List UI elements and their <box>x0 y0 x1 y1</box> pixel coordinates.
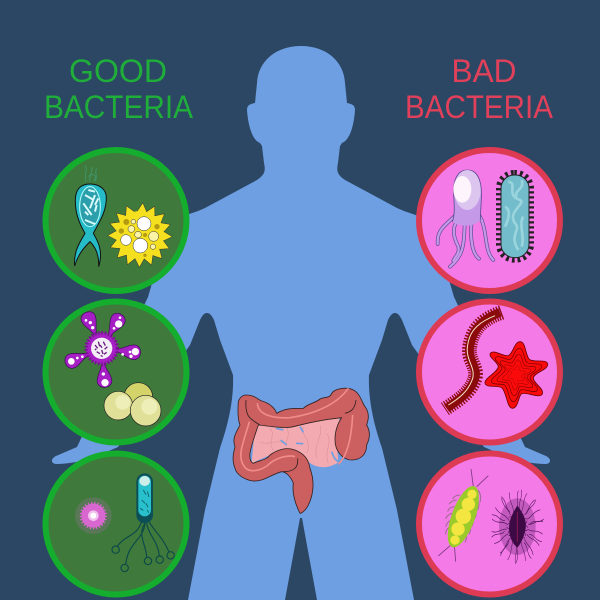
icon: dark red worm bacterium <box>445 312 502 409</box>
panel: bad bacteria 2 <box>419 302 560 442</box>
heading: bad bacteria: BAD <box>452 53 516 89</box>
panel: good bacteria 2 <box>46 302 186 442</box>
heading: bad bacteria: BACTERIA <box>405 89 554 125</box>
small intestine <box>252 414 345 467</box>
icon: red star bacterium <box>485 342 548 408</box>
icon: yellow-green cocci <box>104 383 161 426</box>
heading: bad bacteria <box>405 53 554 125</box>
icon: yellow-green bacterium with legs <box>438 469 488 562</box>
panel: bad bacteria 3 <box>419 454 560 594</box>
icon: dark purple hairy bacterium <box>490 489 545 564</box>
panel: bad bacteria 1 <box>419 150 560 291</box>
colon illustration <box>233 388 369 513</box>
heading: good bacteria: BACTERIA <box>44 89 194 125</box>
icon: purple tentacled bacterium <box>438 170 493 267</box>
large intestine <box>233 388 369 513</box>
panel: good bacteria 1 <box>46 150 186 291</box>
icon: pink glowing coccus <box>75 497 112 534</box>
icon: teal rod with flagella <box>112 473 174 572</box>
heading: good bacteria <box>44 53 194 125</box>
icon: teal forked bacterium <box>74 165 106 267</box>
icon: blue fringed rod bacterium <box>501 175 529 258</box>
heading: good bacteria: GOOD <box>69 53 167 89</box>
icon: purple branched bacterium <box>63 310 141 388</box>
panel: good bacteria 3 <box>46 454 186 594</box>
icon: yellow spiky bacterium <box>108 202 173 267</box>
human body silhouette <box>52 46 550 600</box>
